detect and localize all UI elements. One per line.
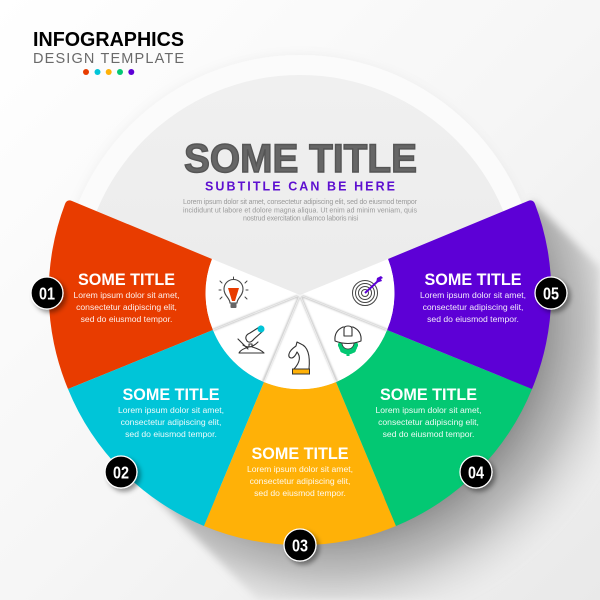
03 text: Lorem ipsum dolor sit amet,	[247, 464, 353, 474]
04 text: consectetur adipiscing elit,	[378, 417, 479, 427]
badge 03	[284, 529, 316, 561]
02 text: sed do eiusmod tempor.	[125, 429, 217, 439]
panel: 04 green	[336, 330, 532, 526]
05 text: sed do eiusmod tempor.	[427, 314, 519, 324]
04 title: SOME TITLE	[380, 385, 477, 404]
icon: light bulb	[219, 277, 248, 308]
panel: 03 yellow	[204, 382, 396, 545]
badge 05: 05	[543, 284, 559, 304]
badge 01	[31, 277, 63, 309]
main body text: Lorem ipsum dolor sit amet, consectetur adipiscing elit, sed do eiusmod tempor	[183, 199, 418, 206]
icon: target with arrow	[352, 276, 383, 306]
icon: microscope	[238, 326, 264, 353]
main body text: incididunt ut labore et dolore magna aliqua. Ut enim ad minim veniam, quis	[183, 208, 418, 214]
badge 04: 04	[468, 463, 484, 483]
main title block	[183, 137, 418, 222]
01 text	[73, 290, 180, 324]
badge 03: 03	[292, 536, 308, 556]
04 text: Lorem ipsum dolor sit amet,	[375, 405, 482, 415]
main body text	[183, 199, 418, 222]
01 text: consectetur adipiscing elit,	[76, 302, 177, 312]
05 text: Lorem ipsum dolor sit amet,	[420, 290, 526, 300]
03 text: consectetur adipiscing elit,	[250, 476, 350, 486]
panel: 05 purple	[387, 200, 551, 389]
badge 02: 02	[113, 463, 129, 483]
01 text: Lorem ipsum dolor sit amet,	[73, 290, 180, 300]
01 text: sed do eiusmod tempor.	[81, 314, 172, 324]
long shadow	[150, 200, 600, 600]
02 text	[118, 405, 224, 439]
main body text: nostrud exercitation ullamco laboris nisi	[243, 216, 358, 222]
03 text	[247, 464, 353, 498]
inner white wedges	[206, 259, 394, 389]
header subtitle: DESIGN TEMPLATE	[33, 51, 184, 67]
outer light ring	[60, 55, 540, 535]
icon: chess knight	[289, 342, 310, 374]
02 text: Lorem ipsum dolor sit amet,	[118, 405, 224, 415]
03 title: SOME TITLE	[252, 444, 348, 463]
main subtitle: SUBTITLE CAN BE HERE	[205, 180, 395, 194]
04 text: sed do eiusmod tempor.	[383, 429, 474, 439]
badge 04	[460, 456, 492, 488]
badge 05	[535, 277, 567, 309]
03 text: sed do eiusmod tempor.	[254, 488, 346, 498]
icon: hard hat with gear	[335, 326, 361, 356]
central grey disc	[80, 75, 520, 515]
05 title: SOME TITLE	[424, 270, 522, 289]
header colour dots	[83, 69, 134, 75]
02 text: consectetur adipiscing elit,	[121, 417, 221, 427]
header title: INFOGRAPHICS	[33, 29, 184, 51]
main title: SOME TITLE	[184, 137, 417, 181]
05 text: consectetur adipiscing elit,	[423, 302, 523, 312]
badge 01: 01	[39, 284, 55, 304]
05 text	[420, 290, 526, 324]
01 title: SOME TITLE	[78, 270, 175, 289]
panel: 02 teal	[68, 330, 264, 526]
panel: 01 red	[49, 200, 213, 389]
badge 02	[105, 456, 137, 488]
header	[33, 29, 184, 75]
02 title: SOME TITLE	[122, 385, 220, 404]
04 text	[375, 405, 482, 439]
